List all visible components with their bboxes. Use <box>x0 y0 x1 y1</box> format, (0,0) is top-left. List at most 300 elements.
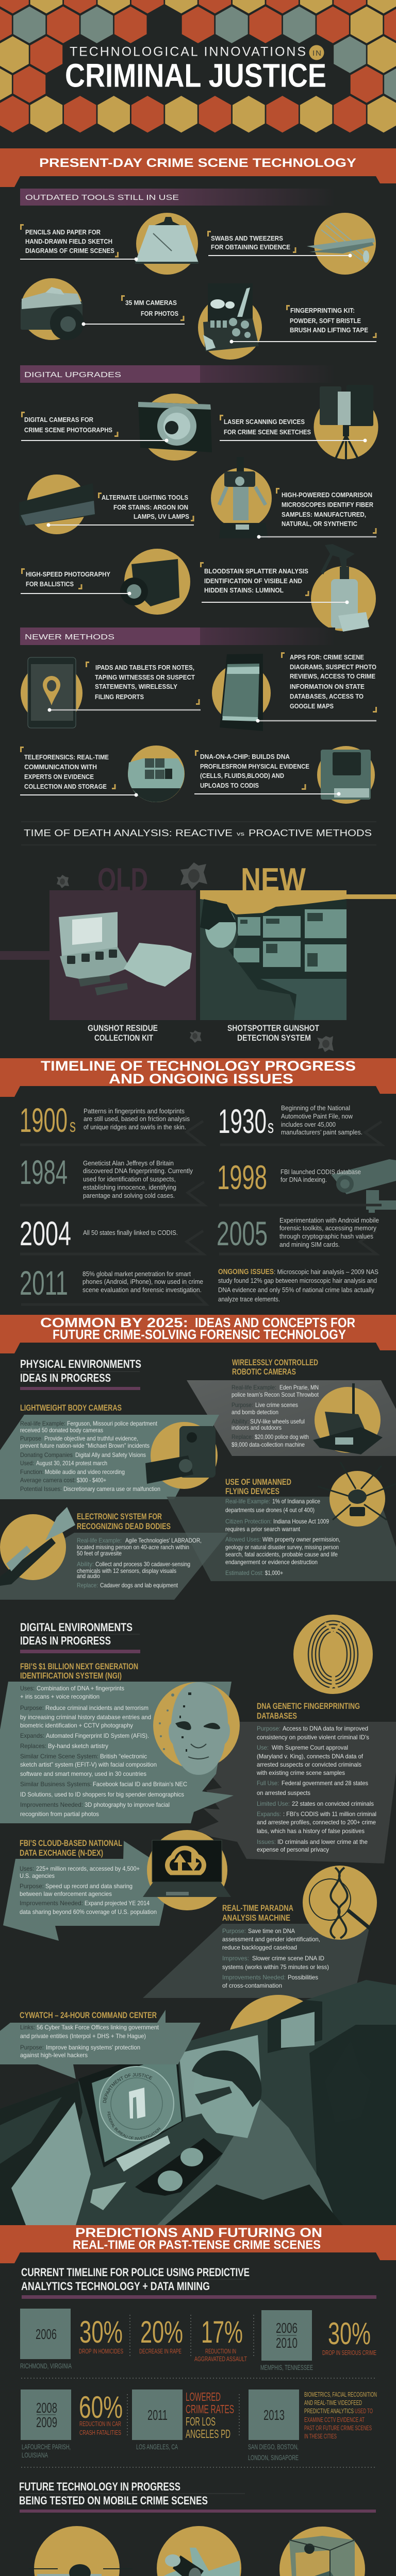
stat: Lafourche 2008-2009: LAFOURCHE PARISH, <box>22 2443 71 2451</box>
timeline: 1984: parentage and solving cold cases. <box>83 1192 175 1199</box>
item: DNA on a chip: UPLOADS TO CODIS <box>200 782 259 789</box>
header hexagon pattern <box>0 0 396 132</box>
item: apps on phone: DIAGRAMS, SUSPECT PHOTO <box>290 663 376 671</box>
icon: flying robot drone <box>28 2526 133 2576</box>
panel: N-DEX data exchange: Purpose: <box>20 1883 44 1890</box>
item: 35 mm cameras: FOR PHOTOS <box>141 310 178 317</box>
item: fingerprinting kit: BRUSH AND LIFTING TAPE <box>290 326 368 334</box>
item: digital cameras <box>21 394 212 461</box>
timeline: 1930s: Automotive Paint File, now <box>281 1113 353 1120</box>
heading: digital environments: IDEAS IN PROGRESS <box>20 1634 111 1647</box>
stat: Richmond 2006: DROP IN HOMICIDES <box>79 2347 123 2355</box>
bullet hole icons <box>57 862 334 1052</box>
timeline: 1930s: manufacturers’ paint samples. <box>281 1129 362 1136</box>
timeline: 1984: discovered DNA fingerprinting. Currently <box>83 1167 193 1175</box>
timeline: 1984: Geneticist Alan Jeffreys of Britain <box>83 1160 174 1167</box>
panel: electronic system for dead bodies: Replace: <box>77 1582 98 1589</box>
panel: DNA genetic fingerprinting: : FBI’s CODIS with 11 million criminal <box>283 1810 376 1818</box>
panel: cywatch command center: against high-level hackers <box>20 2052 88 2059</box>
item: digital cameras: DIGITAL CAMERAS FOR <box>24 416 94 423</box>
panel: FBI NGI system: Similar Business Systems: <box>20 1781 92 1788</box>
heading: future technology <box>19 2480 376 2513</box>
item: comparison microscopes: HIGH-POWERED COMPARISON <box>282 491 372 499</box>
panel: FBI NGI system: sketch artist” system (EFIT-V) with facial composition <box>20 1761 157 1768</box>
timeline: 2005: 2005 <box>217 1214 268 1252</box>
panel: lightweight body cameras: Potential Issues: <box>20 1485 62 1493</box>
panel: wireless robotic cameras: indoors and outdoors <box>232 1424 282 1431</box>
timeline: 2011: scene evaluation and forensic investigation. <box>82 1286 202 1294</box>
photo: FBI command center <box>0 1980 396 2225</box>
panel: N-DEX data exchange: 225+ million records, accessed by 4,500+ <box>36 1865 140 1872</box>
stat: San Diego 2013: 2013 <box>263 2407 285 2423</box>
panel: FBI NGI system: ID Solutions, used to ID shoppers for big spender demographics <box>20 1791 184 1798</box>
item: tablets: IPADS AND TABLETS FOR NOTES, <box>95 664 194 671</box>
stat: Memphis 2006-2010 <box>260 2310 376 2371</box>
panel: FBI NGI system: Purpose: <box>20 1704 44 1711</box>
ongoing issues <box>218 1268 378 1303</box>
panel: real-time paraDNA: REAL-TIME PARADNA <box>222 1903 293 1913</box>
caption: shotspotter detection system: DETECTION SYSTEM <box>237 1033 311 1043</box>
stat: Los Angeles 2011 <box>132 2389 234 2451</box>
stat: Lafourche 2008-2009: REDUCTION IN CAR <box>79 2420 121 2428</box>
timeline: 1998: FBI launched CODIS database <box>280 1168 361 1176</box>
title <box>65 44 326 94</box>
panel: wireless robotic cameras: Purpose: <box>232 1401 253 1409</box>
panel: FBI NGI system: Expands: <box>20 1732 44 1739</box>
panel: cywatch command center: Purpose: <box>20 2044 44 2051</box>
panel: DNA genetic fingerprinting: ID criminals and lower crime at the <box>277 1838 368 1845</box>
item: laser scanning devices: LASER SCANNING DEVICES <box>224 418 305 426</box>
panel: new gunshot detection: NEW <box>241 862 306 897</box>
panel: FBI NGI system: Similar Crime Scene System: <box>20 1753 98 1760</box>
panel: lightweight body cameras: Used: <box>20 1460 34 1467</box>
panel: wireless robotic cameras: Eden Prarie, MN <box>279 1384 319 1391</box>
timeline: 1998: 1998 <box>217 1158 267 1196</box>
item: teleforensics: COLLECTION AND STORAGE <box>24 783 107 790</box>
panel: real-time paraDNA: Purpose: <box>222 1927 246 1935</box>
item: pencils and paper: DIAGRAMS OF CRIME SCENES <box>25 247 114 255</box>
item: comparison microscopes: MICROSCOPES IDENTIFY FIBER <box>282 501 374 509</box>
panel: DNA genetic fingerprinting: and arrestee profiles, connected to 200+ crime <box>257 1819 376 1826</box>
stat: San Diego 2013: SAN DIEGO, BOSTON, <box>248 2443 299 2451</box>
timeline: 1930s: s <box>268 1116 274 1137</box>
timeline: 2011: 85% global market penetration for smart <box>82 1270 191 1278</box>
panel: wireless robotic cameras: Ability: <box>232 1418 249 1425</box>
heading: current timeline: ANALYTICS TECHNOLOGY + DATA MINING <box>21 2280 210 2293</box>
banner: common by 2025: COMMON BY 2025: <box>40 1315 188 1330</box>
heading: digital environments: DIGITAL ENVIRONMENTS <box>20 1621 133 1634</box>
icon: gps dart in hand <box>157 2526 241 2576</box>
panel: cywatch command center: 56 Cyber Task Force Offices linking government <box>37 2024 159 2031</box>
stat: Memphis 2006-2010: 30% <box>328 2316 371 2351</box>
stat: Lafourche 2008-2009 <box>21 2389 123 2459</box>
item: comparison microscopes: NATURAL, OR SYNTHETIC <box>282 520 358 528</box>
timeline: 1930s: Beginning of the National <box>281 1105 350 1112</box>
panel: cywatch command center: CYWATCH – 24-HOUR COMMAND CENTER <box>20 2010 157 2020</box>
timeline: 1998 <box>217 1158 361 1196</box>
panel: cywatch command center: and private entities (Interpol + DHS + The Hague) <box>20 2032 146 2040</box>
panel: N-DEX data exchange: between law enforcement agencies <box>20 1890 112 1897</box>
icon: 3D printer <box>279 2527 365 2576</box>
ongoing issues: DNA evidence and only 55% of national crime labs actually <box>218 1286 375 1294</box>
caption: gunshot residue collection kit: GUNSHOT RESIDUE <box>88 1023 158 1033</box>
item: laser scanning devices <box>220 385 378 460</box>
item: DNA on a chip <box>194 746 375 804</box>
banner: common by 2025: IDEAS AND CONCEPTS FOR <box>195 1315 355 1330</box>
item: apps on phone: INFORMATION ON STATE <box>290 683 365 690</box>
panel: unmanned flying devices: geology or natural disaster survey, missing person <box>225 1544 339 1551</box>
panel: DNA genetic fingerprinting <box>197 1615 396 1863</box>
timeline: 1998: for DNA indexing. <box>280 1176 327 1183</box>
panel: unmanned flying devices: requires a prior search warrant <box>225 1526 301 1533</box>
item: alternate lighting tools: LAMPS, UV LAMPS <box>134 513 189 520</box>
stat: Lafourche 2008-2009: CRASH FATALITIES <box>79 2429 121 2436</box>
heading: time of death analysis <box>21 822 376 845</box>
panel: old gunshot residue kit: OLD <box>97 862 148 897</box>
heading: current timeline: CURRENT TIMELINE FOR POLICE USING PREDICTIVE <box>21 2266 250 2279</box>
item: apps on phone <box>212 653 376 731</box>
item: fingerprinting kit: POWDER, SOFT BRISTLE <box>290 317 361 325</box>
item: DNA on a chip: DNA-ON-A-CHIP: BUILDS DNA <box>200 753 290 760</box>
item: comparison microscopes <box>211 457 376 539</box>
timeline: 1900s: s <box>70 1115 76 1136</box>
panel: FBI NGI system: FBI’S $1 BILLION NEXT GENERATION <box>20 1662 138 1671</box>
stat: Richmond 2006: REDUCTION IN <box>205 2347 236 2355</box>
panel: DNA genetic fingerprinting: Purpose: <box>257 1725 280 1732</box>
panel: N-DEX data exchange: FBI’S CLOUD-BASED NATIONAL <box>20 1838 122 1848</box>
heading: future technology: FUTURE TECHNOLOGY IN PROGRESS <box>19 2480 180 2493</box>
panel: DNA genetic fingerprinting: DATABASES <box>257 1711 297 1721</box>
panel: DNA genetic fingerprinting: consistency on positive violent criminal ID’s <box>257 1734 369 1741</box>
stat: San Diego 2013: LONDON, SINGAPORE <box>248 2453 299 2462</box>
item: fingerprinting kit <box>198 283 376 360</box>
panel: electronic system for dead bodies: Collect and process 30 cadaver-sensing <box>95 1561 190 1568</box>
panel: lightweight body cameras: Donating Companies <box>20 1451 73 1459</box>
item: teleforensics: COMMUNICATION WITH <box>24 763 97 771</box>
item: bloodstain and luminol: IDENTIFICATION OF VISIBLE AND <box>204 577 302 585</box>
timeline: 1930s: includes over 45,000 <box>281 1121 336 1128</box>
item: tablets: STATEMENTS, WIRELESSLY <box>95 683 177 690</box>
panel: FBI NGI system: Automated Fingerprint ID System (AFIS). <box>46 1732 149 1739</box>
stat: Richmond 2006: 30% <box>79 2315 123 2349</box>
ongoing issues: ONGOING ISSUES <box>218 1268 274 1276</box>
timeline: 1984: used for identification of suspects, <box>83 1176 176 1183</box>
banner: present-day crime scene technology: PRESENT-DAY CRIME SCENE TECHNOLOGY <box>39 156 356 170</box>
item: teleforensics <box>20 745 185 802</box>
panel: DNA genetic fingerprinting: DNA GENETIC FINGERPRINTING <box>257 1701 360 1711</box>
timeline chevrons <box>20 1121 382 1304</box>
item: tablets <box>21 657 201 728</box>
subheading bar: newer methods <box>20 628 335 645</box>
panel: unmanned flying devices: Real-life Example: <box>225 1498 270 1505</box>
item: DNA on a chip: (CELLS, FLUIDS,BLOOD) AND <box>200 772 284 779</box>
item: tablets: FILING REPORTS <box>95 693 144 701</box>
panel: real-time paraDNA: Save time on DNA <box>248 1927 295 1935</box>
panel: N-DEX data exchange: U.S. agencies <box>20 1872 55 1879</box>
panel: real-time paraDNA: Improves: <box>222 1955 249 1962</box>
heading: digital environments <box>20 1621 140 1653</box>
panel: FBI NGI system: biometric identification + CCTV photography <box>20 1722 133 1729</box>
panel: DNA genetic fingerprinting: Expands: <box>257 1810 281 1818</box>
panel: electronic system for dead bodies: 50 feet of gravesite <box>77 1550 122 1557</box>
caption: gunshot residue collection kit: COLLECTION KIT <box>94 1033 153 1043</box>
panel: wireless robotic cameras: Real-life Example: <box>232 1384 276 1391</box>
panel: FBI NGI system: British “electronic <box>100 1753 147 1760</box>
panel: wireless robotic cameras: $20,000 police dog with <box>255 1433 309 1440</box>
panel: wireless robotic cameras: Live crime scenes <box>255 1401 298 1409</box>
panel: electronic system for dead bodies: Ability: <box>77 1561 94 1568</box>
caption: gunshot residue collection kit <box>88 1023 158 1043</box>
panel: N-DEX data exchange: Uses: <box>20 1865 34 1872</box>
panel: unmanned flying devices: Citizen Protection: <box>225 1518 272 1525</box>
stat: San Diego 2013 <box>248 2389 377 2462</box>
stat: Richmond 2006: DECREASE IN RAPE <box>139 2347 182 2355</box>
panel: lightweight body cameras: LIGHTWEIGHT BODY CAMERAS <box>20 1403 122 1413</box>
panel: real-time paraDNA: reduce backlogged caseload <box>222 1944 297 1951</box>
banner: timeline: TIMELINE OF TECHNOLOGY PROGRESS <box>41 1058 356 1074</box>
panel: lightweight body cameras: Digital Ally and Safety Visions <box>75 1451 146 1459</box>
timeline: 2011: phones (Android, iPhone), now used in crime <box>82 1278 203 1285</box>
item: comparison microscopes: SAMPLES: MANUFACTURED, <box>282 511 366 518</box>
panel: old gunshot residue kit <box>0 862 196 1020</box>
panel: N-DEX data exchange: Speed up record and data sharing <box>45 1883 133 1890</box>
panel: wireless robotic cameras: police team’s Recon Scout Throwbot <box>232 1391 319 1398</box>
stat: Richmond 2006: AGGRAVATED ASSAULT <box>194 2355 247 2363</box>
panel: lightweight body cameras: Provide objective and truthful evidence, <box>44 1435 138 1442</box>
panel: DNA genetic fingerprinting: (Maryland v. King), connects DNA data of <box>257 1753 364 1760</box>
panel: wireless robotic cameras <box>187 1358 396 1456</box>
heading: physical environments <box>20 1358 141 1390</box>
panel: lightweight body cameras: Function: <box>20 1468 44 1476</box>
item: apps on phone: DATABASES, ACCESS TO <box>290 692 364 700</box>
panel: N-DEX data exchange: Improvements Needed: <box>20 1900 83 1907</box>
banner: predictions and futuring: PREDICTIONS AND FUTURING ON <box>75 2226 322 2240</box>
panel: FBI NGI system: Facebook facial ID and Britain’s NEC <box>93 1781 187 1788</box>
panel: DNA genetic fingerprinting: arrested suspects or convicted criminals <box>257 1761 361 1768</box>
title: TECHNOLOGICAL INNOVATIONS <box>70 44 306 59</box>
heading: physical environments: IDEAS IN PROGRESS <box>20 1371 111 1384</box>
item: DNA on a chip: PROFILESFROM PHYSICAL EVIDENCE <box>200 762 309 770</box>
item: digital cameras: CRIME SCENE PHOTOGRAPHS <box>24 426 112 434</box>
panel: electronic system for dead bodies: Real-life Example: <box>77 1537 122 1544</box>
timeline: 2011 <box>20 1264 203 1302</box>
timeline: 2005: Experimentation with Android mobile <box>279 1217 379 1224</box>
panel: FBI NGI system: Improvements Needed: <box>20 1801 83 1808</box>
stat: Los Angeles 2011: LOS ANGELES, CA <box>136 2443 178 2451</box>
panel: DNA genetic fingerprinting: With Supreme Court approval <box>272 1744 348 1751</box>
stat: Lafourche 2008-2009: 2008 <box>36 2400 57 2416</box>
panel: lightweight body cameras: received 50 donated body cameras <box>20 1427 103 1434</box>
panel: real-time paraDNA: ANALYSIS MACHINE <box>222 1913 290 1923</box>
panel: N-DEX data exchange: Expand projected YE 2014 <box>85 1900 150 1907</box>
panel: unmanned flying devices <box>167 1462 396 1581</box>
panel: unmanned flying devices: USE OF UNMANNED <box>225 1477 291 1487</box>
timeline: 1930s <box>218 1102 362 1140</box>
panel: FBI NGI system <box>0 1662 240 1823</box>
panel: FBI NGI system: software and smart memory, used in 30 countries <box>20 1770 146 1777</box>
panel: FBI NGI system: IDENTIFICATION SYSTEM (NGI) <box>20 1671 122 1681</box>
timeline: 1984: 1984 <box>20 1153 68 1191</box>
panel: electronic system for dead bodies: Cadaver dogs and lab equipment <box>100 1582 178 1589</box>
timeline: CCTV camera icon <box>331 1159 396 1213</box>
stat: Richmond 2006 <box>20 2309 247 2370</box>
item: alternate lighting tools: ALTERNATE LIGHTING TOOLS <box>102 494 188 501</box>
panel: electronic system for dead bodies: located missing person on 40-acre ranch within <box>77 1544 189 1551</box>
panel: DNA genetic fingerprinting: Federal government and 28 states <box>282 1780 368 1787</box>
panel: unmanned flying devices: endangerment or evidence destruction <box>225 1558 318 1566</box>
item: high-speed photography <box>21 549 190 615</box>
dotted separators <box>21 2315 375 2576</box>
photo: FBI command center: DEPARTMENT OF JUSTICE <box>103 2073 153 2103</box>
panel: unmanned flying devices: search, fatal accidents, probable cause and life <box>225 1551 338 1558</box>
panel: DNA genetic fingerprinting: Limited Use: <box>257 1800 290 1807</box>
panel: FBI NGI system: By-hand sketch artistry <box>48 1742 108 1750</box>
panel: N-DEX data exchange: DATA EXCHANGE (N-DEX) <box>20 1848 103 1858</box>
panel: FBI NGI system: 3D photography to improve facial <box>85 1801 170 1808</box>
panel: real-time paraDNA: Improvements Needed: <box>222 1974 286 1981</box>
panel: real-time paraDNA: systems (works within 75 minutes or less) <box>222 1963 329 1971</box>
timeline: 2005: through cryptographic hash values <box>279 1233 373 1240</box>
stat: San Diego 2013: PREDICTIVE ANALYTICS <box>304 2407 354 2415</box>
panel: wireless robotic cameras: ROBOTIC CAMERAS <box>232 1367 296 1377</box>
panel: FBI NGI system: + iris scans + voice recognition <box>20 1693 100 1700</box>
panel: unmanned flying devices: $1,000+ <box>265 1569 283 1577</box>
panel: cywatch command center <box>0 2010 201 2079</box>
panel: DNA genetic fingerprinting: expense of personal privacy <box>257 1846 329 1853</box>
timeline: 1984 <box>20 1153 193 1199</box>
item: fingerprinting kit: FINGERPRINTING KIT: <box>290 307 355 314</box>
stat: Memphis 2006-2010: MEMPHIS, TENNESSEE <box>260 2363 313 2371</box>
panel: FBI NGI system: Replaces: <box>20 1742 46 1750</box>
stat: Los Angeles 2011: LOWERED <box>186 2390 221 2403</box>
item: apps on phone: APPS FOR: CRIME SCENE <box>290 653 364 661</box>
panel: N-DEX data exchange: data sharing beyond 60% coverage of U.S. population <box>20 1908 157 1916</box>
panel: wireless robotic cameras: and bomb detection <box>232 1409 278 1416</box>
panel: cywatch command center: Links: <box>20 2024 35 2031</box>
subheading bar: digital upgrades: DIGITAL UPGRADES <box>24 370 121 379</box>
caption: shotspotter detection system: SHOTSPOTTER GUNSHOT <box>227 1023 320 1033</box>
stat: San Diego 2013: USED TO <box>355 2407 373 2415</box>
banner: timeline: AND ONGOING ISSUES <box>109 1071 293 1087</box>
item: tablets: TAPING WITNESSES OR SUSPECT <box>95 673 195 681</box>
panel: FBI NGI system: recognition from partial photos <box>20 1810 99 1818</box>
stat: Memphis 2006-2010: 2006 <box>276 2320 298 2336</box>
item: laser scanning devices: FOR CRIME SCENE SKETCHES <box>224 428 311 436</box>
timeline: 1900s: 1900 <box>20 1101 68 1139</box>
banner: predictions and futuring: REAL-TIME OR PAST-TENSE CRIME SCENES <box>73 2238 321 2252</box>
item: 35 mm cameras <box>21 278 185 340</box>
title: CRIMINAL JUSTICE <box>65 57 326 94</box>
stat: San Diego 2013: AND REAL-TIME VIDEOFEED <box>304 2399 362 2406</box>
item: teleforensics: TELEFORENSICS: REAL-TIME <box>24 753 109 761</box>
panel: lightweight body cameras: Purpose <box>20 1435 41 1442</box>
panel: unmanned flying devices: With property owner permission, <box>262 1536 340 1543</box>
item: teleforensics: EXPERTS ON EVIDENCE <box>24 773 94 781</box>
subheading bar: digital upgrades <box>20 365 335 383</box>
panel: DNA genetic fingerprinting: Full Use: <box>257 1780 279 1787</box>
heading: time of death analysis: PROACTIVE METHODS <box>249 828 372 838</box>
item: pencils and paper <box>20 213 199 275</box>
panel: FBI NGI system: by increasing criminal history database entries and <box>20 1714 151 1721</box>
panel: lightweight body cameras <box>0 1403 219 1499</box>
stat: San Diego 2013: IN THESE CITIES <box>304 2432 337 2440</box>
panel: real-time paraDNA <box>143 1866 377 1998</box>
heading: current timeline <box>21 2266 376 2299</box>
panel: DNA genetic fingerprinting: on arrested suspects <box>257 1789 310 1797</box>
panel: FBI NGI system: Uses: <box>20 1685 35 1692</box>
panel: electronic system for dead bodies <box>0 1507 228 1600</box>
panel: FBI NGI system: Reduce criminal incidents and terrorism <box>45 1704 148 1711</box>
heading: time of death analysis: vs <box>237 831 245 837</box>
timeline: 2005: forensic toolkits, accessing memory <box>279 1225 377 1232</box>
stat: Richmond 2006: RICHMOND, VIRGINIA <box>20 2362 72 2370</box>
heading: time of death analysis: TIME OF DEATH ANALYSIS: REACTIVE <box>24 828 233 838</box>
panel: lightweight body cameras: Discretionary camera use or malfunction <box>63 1485 160 1493</box>
panel: electronic system for dead bodies: ELECTRONIC SYSTEM FOR <box>77 1512 162 1521</box>
panel: lightweight body cameras: Mobile audio and video recording <box>45 1468 125 1476</box>
timeline: 1900s: of unique ridges and swirls in the skin. <box>84 1124 186 1131</box>
heading: future technology: BEING TESTED ON MOBILE CRIME SCENES <box>19 2494 208 2507</box>
timeline: 1900s: are still used, based on friction analysis <box>84 1115 190 1123</box>
banner: common by 2025 <box>0 1315 396 1353</box>
panel: unmanned flying devices: Estimated Cost: <box>225 1569 263 1577</box>
panel: new gunshot detection <box>200 862 396 1020</box>
panel: unmanned flying devices: Indiana House Act 1009 <box>273 1518 329 1525</box>
title: IN <box>312 49 321 58</box>
banner: present-day crime scene technology <box>0 148 396 187</box>
timeline: 2011: 2011 <box>20 1264 68 1302</box>
item: pencils and paper: PENCILS AND PAPER FOR <box>25 228 101 236</box>
panel: DNA genetic fingerprinting: 22 states on convicted criminals <box>292 1800 374 1807</box>
panel: lightweight body cameras: Average camera cost: <box>20 1477 76 1484</box>
panel: lightweight body cameras: $300 - $400+ <box>77 1477 106 1484</box>
subheading bar: outdated tools <box>20 189 335 206</box>
item: swabs and tweezers <box>208 213 376 275</box>
panel: DNA genetic fingerprinting: with existing crime scene samples <box>256 1769 345 1776</box>
panel: cywatch command center: Improve banking systems’ protection <box>46 2044 140 2051</box>
panel: wireless robotic cameras: WIRELESSLY CONTROLLED <box>232 1358 318 1367</box>
panel: wireless robotic cameras: $9,000 data-collection machine <box>232 1441 305 1448</box>
heading: physical environments: PHYSICAL ENVIRONMENTS <box>20 1358 141 1370</box>
panel: real-time paraDNA: assessment and gender identification, <box>222 1936 320 1943</box>
panel: unmanned flying devices: departments use drones (4 out of 400) <box>225 1506 315 1514</box>
panel: DNA genetic fingerprinting: labs, which has a history of false positives <box>257 1827 365 1835</box>
item: pencils and paper: HAND-DRAWN FIELD SKETCH <box>25 238 112 245</box>
banner: timeline <box>0 1058 396 1097</box>
panel: real-time paraDNA: of cross-contamination <box>222 1982 282 1989</box>
panel: real-time paraDNA: Possibilities <box>288 1974 318 1981</box>
stat: Richmond 2006: 2006 <box>36 2326 57 2342</box>
stat: Memphis 2006-2010: 2010 <box>276 2335 298 2351</box>
item: 35 mm cameras: 35 MM CAMERAS <box>125 299 177 307</box>
item: swabs and tweezers: FOR OBTAINING EVIDENCE <box>211 243 290 251</box>
item: apps on phone: GOOGLE MAPS <box>290 702 334 710</box>
stat: Los Angeles 2011: CRIME RATES <box>186 2402 234 2416</box>
panel: wireless robotic cameras: Replace: <box>232 1433 253 1440</box>
panel: DNA genetic fingerprinting: Use: <box>257 1744 269 1751</box>
banner: common by 2025: FUTURE CRIME-SOLVING FORENSIC TECHNOLOGY <box>53 1327 346 1342</box>
stat: Lafourche 2008-2009: LOUISIANA <box>22 2451 48 2459</box>
caption: shotspotter detection system <box>227 1023 320 1043</box>
panel: electronic system for dead bodies: Agile Technologies’ LABRADOR, <box>125 1537 202 1544</box>
item: bloodstain and luminol <box>201 544 376 632</box>
panel: unmanned flying devices: FLYING DEVICES <box>225 1486 279 1496</box>
item: bloodstain and luminol: HIDDEN STAINS: LUMINOL <box>204 586 284 594</box>
ongoing issues: study found 12% gap between microscopic hair analysis and <box>218 1277 377 1284</box>
timeline: 1984: establishing innocence, identifying <box>83 1184 176 1191</box>
item: apps on phone: REVIEWS, ACCESS TO CRIME <box>290 672 375 680</box>
stat: Los Angeles 2011: ANGELES PD <box>186 2427 230 2441</box>
